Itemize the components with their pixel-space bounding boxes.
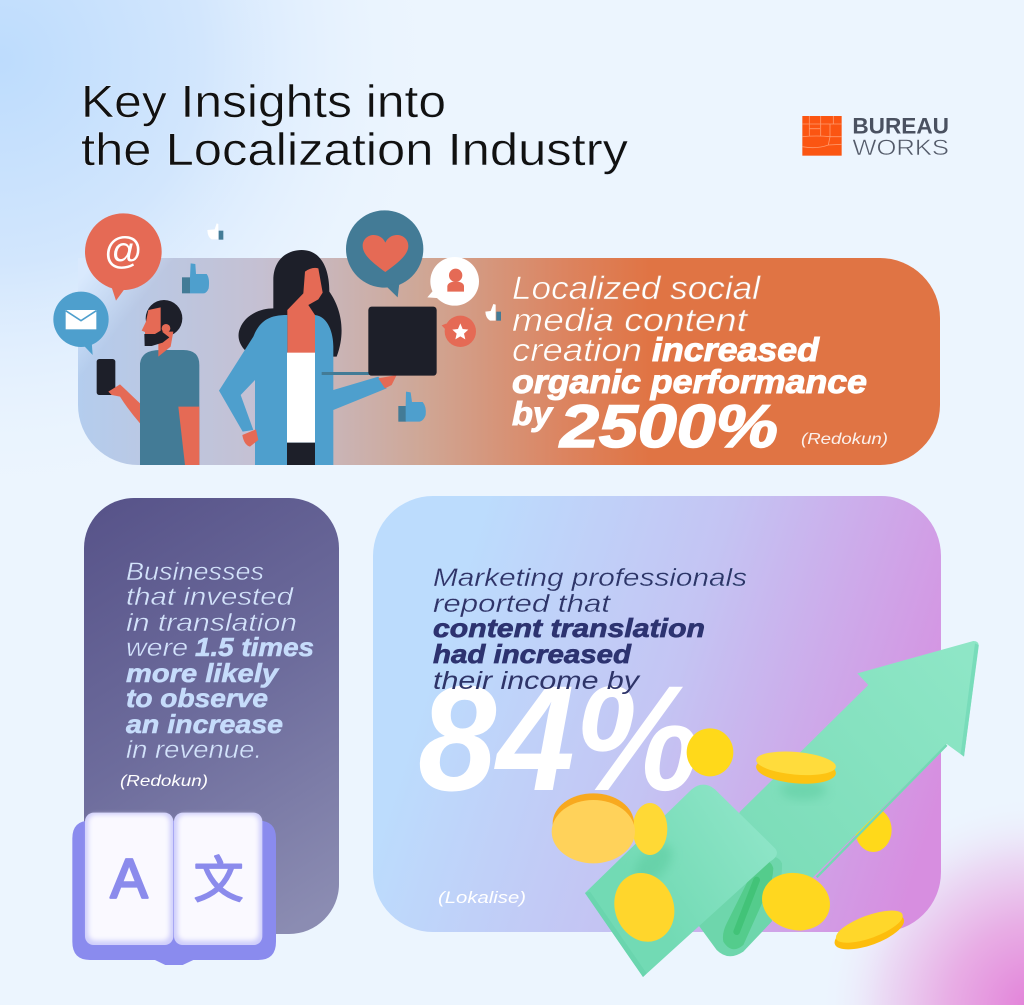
illustration: arrow and coins — [552, 641, 979, 977]
illustration: social media people — [53, 210, 501, 465]
text: revenue statistic: in revenue. — [126, 736, 262, 764]
icon: translation book: A — [110, 846, 148, 909]
text: income statistic: reported that — [433, 590, 611, 618]
logo: Bureau Works: BUREAU — [852, 113, 949, 138]
coin behind arrow — [855, 808, 892, 852]
icon: translation book: 文 — [194, 840, 244, 912]
panel: revenue — [84, 498, 339, 934]
text: social media statistic: (Redokun) — [801, 431, 888, 448]
icon: at bubble: @ — [104, 229, 143, 272]
text: revenue statistic: were — [126, 634, 188, 662]
coins — [552, 728, 908, 957]
text: revenue statistic — [120, 558, 314, 790]
icon: star bubble — [442, 316, 476, 347]
panel: income — [373, 496, 941, 932]
icon: mail bubble — [53, 292, 109, 355]
icon: user bubble — [427, 257, 479, 306]
icon: at bubble — [85, 213, 162, 301]
text: revenue statistic: 1.5 times — [195, 632, 314, 662]
text: income statistic: (Lokalise) — [438, 888, 526, 907]
icon: small thumb top — [207, 223, 223, 240]
icon: translation book — [72, 813, 276, 965]
text: social media statistic: by — [512, 395, 554, 432]
text: revenue statistic: more likely — [126, 658, 280, 688]
text: revenue statistic: that invested — [126, 583, 294, 611]
text: social media statistic: Localized social — [512, 270, 761, 306]
arrow — [713, 641, 979, 930]
icon: thumb low — [398, 392, 426, 422]
big number: 84% — [418, 654, 700, 822]
text: income statistic: Marketing professionals — [433, 564, 747, 592]
title — [81, 76, 629, 175]
title: Key Insights into — [81, 76, 446, 127]
logo: Bureau Works — [802, 113, 949, 160]
panel: social media — [78, 258, 940, 465]
icon: small thumb right — [485, 304, 501, 321]
woman — [219, 250, 437, 465]
text: income statistic: their income by — [433, 667, 641, 695]
icon: heart bubble — [346, 210, 423, 297]
text: social media statistic: organic performance — [512, 363, 867, 400]
text: social media statistic — [512, 270, 888, 460]
text: revenue statistic: an increase — [126, 709, 283, 739]
text: social media statistic: media content — [512, 302, 748, 338]
text: revenue statistic: Businesses — [126, 558, 264, 586]
text: revenue statistic: to observe — [126, 683, 268, 713]
text: income statistic: had increased — [433, 639, 632, 669]
title: the Localization Industry — [81, 124, 629, 175]
logo: Bureau Works: WORKS — [852, 135, 949, 160]
text: income statistic — [418, 564, 747, 907]
text: revenue statistic: (Redokun) — [120, 773, 208, 790]
text: social media statistic: increased — [652, 331, 820, 368]
man — [97, 300, 199, 465]
text: social media statistic: creation — [512, 332, 642, 368]
icon: thumb — [182, 263, 209, 293]
text: revenue statistic: in translation — [126, 609, 297, 637]
text: income statistic: content translation — [433, 613, 705, 643]
paper roll — [585, 785, 782, 977]
text: social media statistic: 2500% — [559, 393, 778, 460]
